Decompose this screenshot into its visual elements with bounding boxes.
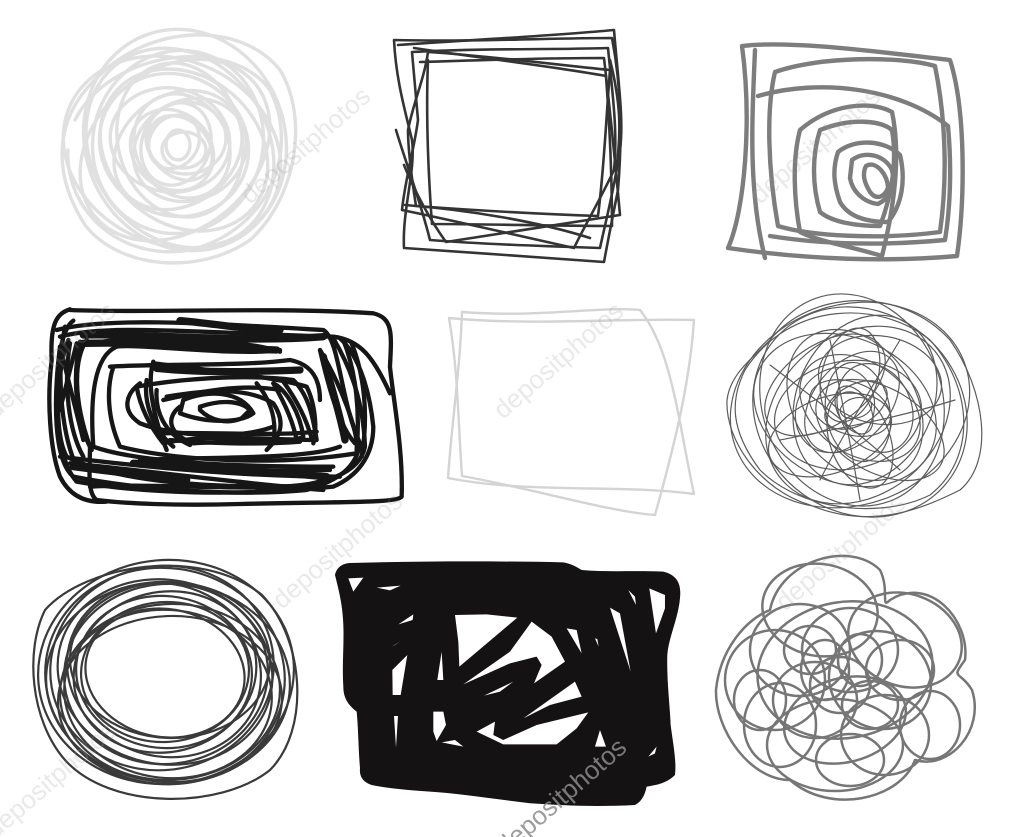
panel: gray looping scribble xyxy=(716,555,975,800)
black mass xyxy=(335,561,680,806)
panel: black rectangular scribble xyxy=(49,309,402,505)
watermarks: depositphotos xyxy=(266,486,408,615)
panel: thick black scribble block xyxy=(335,561,680,806)
watermarks: depositphotos xyxy=(744,81,886,210)
panel: thin gray round scribble xyxy=(701,263,1010,561)
panel: gray square spiral xyxy=(728,44,963,259)
panel: light gray round scribble xyxy=(32,1,317,284)
watermarks: depositphotos xyxy=(769,488,911,617)
watermarks: depositphotos xyxy=(234,81,376,210)
white gaps xyxy=(348,578,665,757)
panel: light gray thin square xyxy=(448,309,694,515)
panel: dark overlapping squares xyxy=(394,30,621,262)
panel: dark ring scribble xyxy=(29,548,303,800)
watermarks: depositphotos xyxy=(487,296,629,425)
